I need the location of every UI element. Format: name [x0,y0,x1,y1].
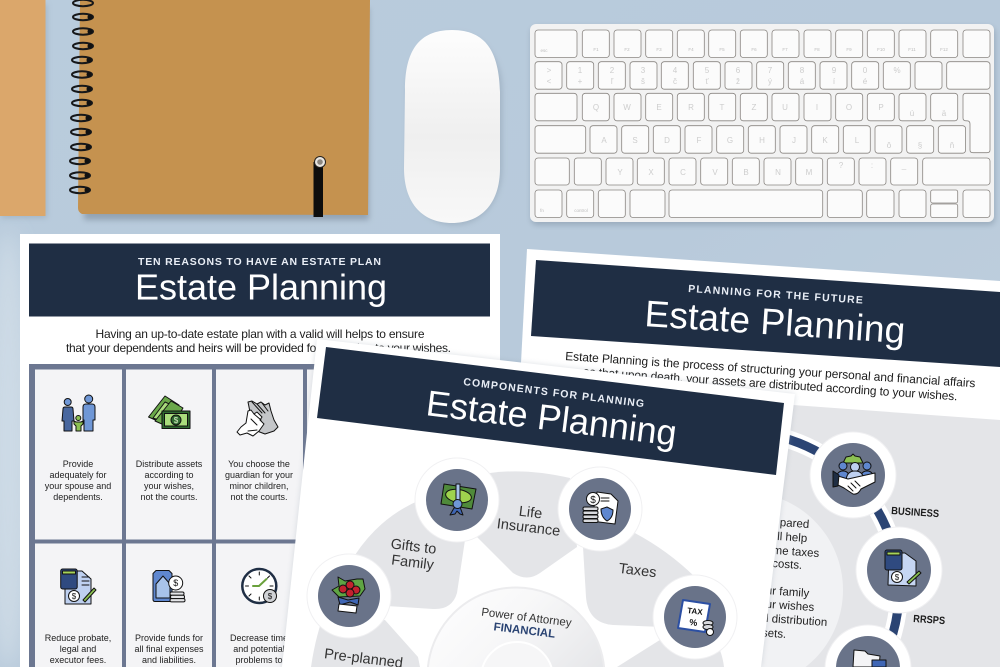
keyboard key legends: č [673,77,677,86]
keyboard key legends: ý [768,77,772,86]
disc label: FINANCIAL [493,621,556,641]
keyboard key legends: C [680,168,686,177]
keyboard key legends: 6 [736,66,741,75]
poster title: Estate Planning [135,266,387,308]
keyboard key legends: : [871,161,873,170]
wheel segments [311,471,724,667]
intro text: so that upon death, your assets are distributed according to your wishes. [583,365,958,403]
card: distribute assets [126,370,212,540]
card text: Provide [63,459,93,469]
keyboard key legends: F2 [624,47,630,52]
card text: Reduce probate, [45,633,111,643]
icon: handshake and team [833,454,875,494]
power of attorney disc [428,588,604,667]
card text: Provide funds for [135,633,203,643]
keyboard key legends: esc [540,48,548,53]
keyboard key legends: F9 [846,47,852,52]
card text: all final expenses [134,644,204,654]
keyboard key legends: á [800,77,805,86]
card: provide for family [35,370,122,540]
wireless mouse [404,30,502,225]
card text [225,459,293,502]
keyboard key legends: E [656,103,662,112]
card text: not the courts. [140,492,198,502]
node: business [810,432,896,518]
keyboard key legends: J [792,136,796,145]
card text [134,633,204,665]
keyboard key legends: _ [901,161,907,170]
central text disc: pared [779,517,810,531]
keyboard key legends: I [816,103,818,112]
segment labels: Gifts to [390,536,437,558]
card text: adequately for [49,470,107,480]
header banner [317,347,784,475]
card text: legal and [60,644,96,654]
keyboard key legends: S [632,136,638,145]
keyboard key legends: T [720,103,725,112]
icon: tax clipboard: % [689,617,698,628]
keyboard key legends: Q [593,103,599,112]
keyboard key legends: F11 [908,47,916,52]
node: documents [825,625,911,667]
icon: tax clipboard [678,600,714,636]
central text disc: me taxes [772,545,820,560]
keyboard key legends: U [782,103,788,112]
poster: ten reasons [20,234,500,667]
icon: clasped hands [237,401,278,436]
keyboard key legends: F10 [877,47,885,52]
card: reduce fees [35,544,122,667]
keyboard key legends: O [846,103,852,112]
card text: executor fees. [50,655,106,665]
disc label: Power of Attorney [481,607,572,630]
keyboard key legends [540,47,954,213]
intro text: Having an up-to-date estate plan with a valid will helps to ensure [96,327,425,341]
keyboard key legends: B [743,168,749,177]
card: decrease time [216,544,303,667]
card text: and liabilities. [142,655,196,665]
card text: minor children, [229,481,289,491]
node: flowers [307,554,391,638]
poster: planning for the future [505,249,1000,667]
keyboard key legends: 8 [800,66,805,75]
keyboard key legends: 5 [705,66,710,75]
central text disc: l distribution [766,613,828,629]
label: business: BUSINESS [891,505,939,520]
keyboard key legends: í [833,77,836,86]
keyboard key legends: F6 [751,47,757,52]
poster: components for planning [282,339,795,667]
keyboard key legends: F5 [719,47,725,52]
icon: house and coins: $ [173,578,178,588]
segment labels: Insurance [496,516,561,540]
node: tax [653,575,737,659]
keyboard key legends: % [893,66,901,75]
card text: problems to [235,655,283,665]
keyboard key legends: D [664,136,670,145]
central text disc: ur wishes [765,599,815,614]
card text: your spouse and [45,481,111,491]
keyboard key legends: M [806,168,813,177]
eyebrow text: PLANNING FOR THE FUTURE [688,283,863,307]
card: provide funds [126,544,212,667]
keyboard key legends: F4 [688,47,694,52]
reasons grid [29,364,490,667]
keyboard key legends: A [601,136,607,145]
central text disc: ll help [777,531,808,545]
keyboard key legends: 1 [578,66,583,75]
keyboard key legends: 7 [768,66,773,75]
keyboard key legends: 3 [641,66,646,75]
keyboard key legends: F7 [782,47,788,52]
node: taxes [558,467,642,551]
card text: dependents. [53,492,103,502]
notebook spiral binding [70,0,93,193]
keyboard key legends: X [648,168,654,177]
segment labels: Family [390,552,435,574]
icon: flower bouquet [332,577,365,613]
keyboard key legends: N [775,168,781,177]
keyboard key legends: F12 [940,47,948,52]
header banner [29,244,490,316]
card text [45,459,111,502]
keyboard key legends: § [918,141,922,150]
keyboard key legends: > [547,66,552,75]
keyboard key legends: ô [887,141,892,150]
icon: calculator and statement: $ [895,573,900,582]
icon: coins and shield document: $ [590,495,596,506]
keyboard key legends: ň [950,141,954,150]
keyboard key legends: + [578,77,583,86]
label: rrsps: RRSPS [913,613,946,627]
keyboard key legends: 2 [610,66,615,75]
keyboard key legends: G [727,136,733,145]
eyebrow text: COMPONENTS FOR PLANNING [463,376,645,410]
icon: insured money [441,484,476,515]
keyboard key legends: é [863,77,868,86]
icon: money: $ [174,416,179,425]
poster title: Estate Planning [424,382,679,454]
keyboard key legends: ú [910,109,914,118]
card text: Distribute assets [136,459,203,469]
card text: not the courts. [230,492,288,502]
keyboard key legends: L [855,136,860,145]
keyboard key legends: K [822,136,828,145]
poster title: Estate Planning [643,293,907,351]
icon: money [148,396,190,428]
ring connector [583,432,899,667]
keyboard key legends: H [759,136,765,145]
keyboard key legends: V [712,168,718,177]
card text: You choose the [228,459,290,469]
keyboard key legends: ä [942,109,947,118]
segment labels: Life [518,504,543,522]
elastic band and eyelet [314,156,326,217]
grey panel [740,405,1000,667]
keyboard key legends: control [574,208,588,213]
disc label [481,607,572,641]
central text disc: costs. [772,558,803,572]
card text [45,633,111,665]
keyboard keys [535,30,990,218]
intro text: Estate Planning is the process of structuring your personal and financial affairs [565,349,976,390]
keyboard key legends: Y [617,168,623,177]
keyboard key legends: F8 [814,47,820,52]
spiral notebook [70,0,370,220]
icon: tax clipboard: TAX [687,606,704,617]
keyboard key legends: Z [752,103,757,112]
card text: guardian for your [225,470,293,480]
keyboard key legends: R [688,103,694,112]
card text: your wishes, [144,481,194,491]
keyboard key legends: fn [540,208,544,213]
card text [136,459,203,502]
intro text: that your dependents and heirs will be provided for according to your wishes. [66,341,451,355]
segment labels [323,504,657,667]
keyboard key legends: š [641,77,645,86]
card text: and potential [233,644,285,654]
card text: Decrease time [230,633,288,643]
keyboard key legends: F3 [656,47,662,52]
keyboard key legends: F [697,136,702,145]
keyboard key legends: 0 [863,66,868,75]
icon: clock and coin: $ [268,592,273,601]
card: choose guardian [216,370,303,540]
central text disc: sets. [762,627,787,641]
keyboard key legends: ? [839,161,844,170]
eyebrow text: TEN REASONS TO HAVE AN ESTATE PLAN [138,256,381,268]
keyboard key legends: W [623,103,631,112]
icon: calculator and statement: $ [72,592,77,601]
intro text [66,327,451,355]
keyboard key legends: < [547,77,552,86]
central text disc: ur family [765,585,810,600]
segment labels: Taxes [618,561,657,581]
keyboard key legends: P [878,103,884,112]
card text: according to [144,470,194,480]
header banner [531,260,1000,367]
keyboard key legends: ť [706,77,710,86]
central text disc [647,492,843,667]
icon: folders [853,650,886,667]
card text [230,633,288,665]
keyboard [530,24,995,225]
keyboard key legends: ľ [611,77,614,86]
keyboard key legends: ž [736,77,740,86]
keyboard key legends: 9 [832,66,837,75]
keyboard key legends: F1 [593,47,599,52]
node: rrsps [856,527,942,613]
icon: family [62,395,95,431]
keyboard key legends: 4 [673,66,678,75]
node: life insurance [415,458,499,542]
kraft paper sheet [0,0,47,218]
spiral binding holes [84,14,92,192]
